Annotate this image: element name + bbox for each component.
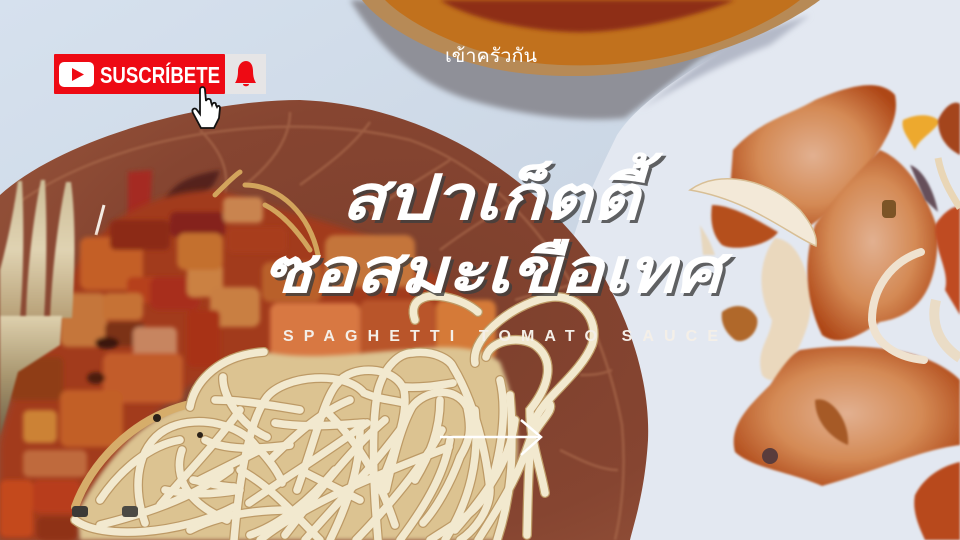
fried chicken wings and onions <box>690 85 960 540</box>
arrow <box>440 420 541 455</box>
spaghetti noodle mass <box>72 172 594 540</box>
title line 1: สปาเก็ตตี้ <box>341 152 664 233</box>
red button <box>54 54 225 94</box>
plate rim ribs <box>15 112 624 540</box>
wing top <box>730 85 896 232</box>
bell background <box>225 54 266 94</box>
top plate <box>362 0 820 76</box>
title line 1 <box>341 152 667 236</box>
orange sauce splash <box>902 115 940 150</box>
subtitle: SPAGHETTI TOMATO SAUCE <box>283 328 718 345</box>
white plate <box>570 0 960 540</box>
icon: youtube logo <box>59 62 94 87</box>
title line 2: ซอสมะเขือเทศ <box>266 240 736 309</box>
wing middle <box>807 150 938 340</box>
golden noodles at top of the sauce <box>215 172 318 255</box>
title line 2: ซอสมะเขือเทศ <box>263 237 733 306</box>
subscribe button <box>54 54 266 128</box>
chili and dark pieces on rim <box>128 170 152 222</box>
wing bottom <box>734 346 960 486</box>
fork <box>0 180 74 436</box>
icon: bell <box>235 61 256 86</box>
title line 1: สปาเก็ตตี้ <box>344 155 667 236</box>
title block <box>263 152 736 309</box>
onions <box>690 179 816 246</box>
button label: SUSCRÍBETE <box>100 61 220 88</box>
small top text: เข้าครัวกัน <box>445 46 537 67</box>
icon: hand cursor <box>192 87 220 128</box>
shadow of top plate <box>350 0 740 119</box>
shadow on white plate <box>640 15 810 110</box>
sauce and meat <box>0 190 496 540</box>
brown plate with spaghetti <box>0 100 648 540</box>
pale onion mass <box>760 238 811 380</box>
wing pieces at right edge <box>938 103 960 155</box>
plate body <box>0 100 648 540</box>
